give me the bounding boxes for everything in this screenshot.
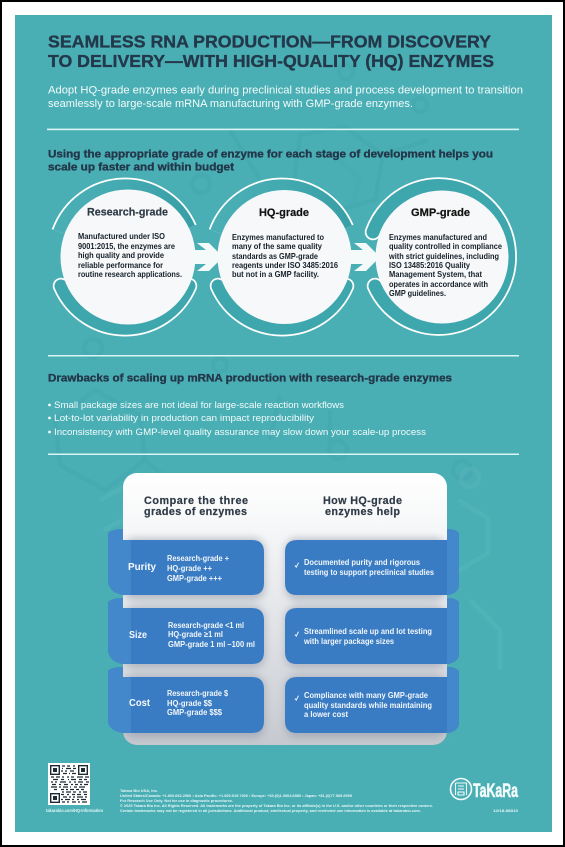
row: purity: HQ-grade ++ <box>167 564 212 573</box>
arrow: research to HQ <box>193 243 223 271</box>
benefit: cost <box>285 667 459 733</box>
benefit: cost: a lower cost <box>304 710 348 719</box>
section heading: drawbacks: Drawbacks of scaling up mRNA production with research-grade enzymes <box>48 372 452 384</box>
bullet list: Small package sizes are not ideal for large-scale reaction workflows <box>54 400 344 411</box>
column heading: compare: grades of enzymes <box>144 506 247 518</box>
column heading: how HQ helps: enzymes help <box>325 506 400 518</box>
circle: research-grade: Manufactured under ISO <box>78 232 166 241</box>
circle: HQ-grade: many of the same quality <box>232 242 322 251</box>
circle: HQ-grade <box>216 186 352 328</box>
intro text: seamlessly to large-scale mRNA manufacturing with GMP-grade enzymes. <box>48 98 413 110</box>
circle: GMP-grade: Management System, that <box>389 270 482 279</box>
benefit: size: with larger package sizes <box>303 637 395 646</box>
circle: HQ-grade: Enzymes manufactured to <box>232 233 324 242</box>
row: cost: Cost <box>129 697 150 709</box>
section heading: grades: Using the appropriate grade of enzyme for each stage of development helps you <box>48 148 493 160</box>
panel shadows <box>123 538 447 738</box>
row: cost <box>108 667 264 733</box>
circle: research-grade: high quality and provide <box>78 251 164 260</box>
benefit: size <box>285 598 459 664</box>
row: size <box>108 598 264 664</box>
circle: research-grade: reliable performance for <box>78 261 164 270</box>
column heading: how HQ helps <box>323 495 402 518</box>
logo: TaKaRa <box>450 778 518 802</box>
QR code <box>48 763 90 805</box>
circle: GMP-grade: GMP-grade <box>411 207 470 219</box>
row: cost: HQ-grade $$ <box>167 699 213 708</box>
row: purity: Research-grade + <box>167 554 229 563</box>
legal footer text: Certain trademarks may not be registered in all jurisdictions. Additional product, intellectual property, and restricted use information is available at takarabio.com. <box>120 809 421 813</box>
benefit: size: Streamlined scale up and lot testing <box>304 627 432 636</box>
intro text: Adopt HQ-grade enzymes early during preclinical studies and process development to transition <box>48 84 523 96</box>
row: cost: GMP-grade $$$ <box>167 708 223 717</box>
circle: GMP-grade: operates in accordance with <box>389 280 488 289</box>
circle: GMP-grade: ISO 13485:2016 Quality <box>389 261 470 270</box>
circle: GMP-grade: quality controlled in compliance <box>389 242 502 251</box>
document code: 12/18.88810 <box>493 809 518 813</box>
circle: research-grade <box>60 186 196 328</box>
section heading: grades: scale up faster and within budget <box>48 162 234 174</box>
section heading: grades <box>48 148 493 174</box>
row: purity: GMP-grade +++ <box>167 574 222 583</box>
legal footer text: United States/Canada: +1.800.662.2566 • Asia Pacific: +1.650.919.7300 • Europe: +33.(0)1.3904.6880 • Japan: +81.(0)77.565.6999 <box>120 794 352 798</box>
logo: TaKaRa: TaKaRa <box>473 780 518 802</box>
benefit: purity: Documented purity and rigorous <box>304 558 421 567</box>
comparison panel <box>123 473 447 745</box>
legal footer text: Takara Bio USA, Inc. <box>120 789 158 793</box>
row: size: Size <box>129 629 147 641</box>
row: purity <box>108 529 264 595</box>
title <box>48 32 494 71</box>
circle: HQ-grade: HQ-grade <box>259 207 309 219</box>
row: cost: Research-grade $ <box>167 689 228 698</box>
background molecule pattern, lower right and left <box>100 469 500 670</box>
circle: GMP-grade <box>373 186 509 328</box>
benefit: purity: testing to support preclinical studies <box>304 568 435 577</box>
row: size: HQ-grade ≥1 ml <box>168 630 223 639</box>
arrow: HQ to GMP <box>350 243 380 271</box>
column heading: compare: Compare the three <box>144 495 248 507</box>
bullet list: Lot-to-lot variability in production can impact reproducibility <box>54 413 314 424</box>
circle: GMP-grade: Enzymes manufactured and <box>389 233 487 242</box>
row: size: GMP-grade 1 ml –100 ml <box>168 640 255 649</box>
benefit: purity <box>285 529 459 595</box>
benefit: cost: quality standards while maintaining <box>304 701 432 710</box>
column heading: how HQ helps: How HQ-grade <box>323 495 402 507</box>
row: size: Research-grade <1 ml <box>168 621 244 630</box>
title: SEAMLESS RNA PRODUCTION—FROM DISCOVERY <box>48 32 491 52</box>
legal footer text <box>120 789 433 813</box>
circle: HQ-grade: standards as GMP-grade <box>232 252 318 261</box>
bullet list: Inconsistency with GMP-level quality assurance may slow down your scale-up process <box>54 427 426 438</box>
benefit: cost: Compliance with many GMP-grade <box>304 691 429 700</box>
circle: research-grade: routine research applications. <box>78 270 182 279</box>
circle: research-grade: Research-grade <box>87 206 168 218</box>
title: TO DELIVERY—WITH HIGH-QUALITY (HQ) ENZYMES <box>48 51 494 71</box>
legal footer text: For Research Use Only. Not for use in diagnostic procedures. <box>120 799 233 803</box>
circle: HQ-grade: reagents under ISO 3485:2016 <box>232 261 338 270</box>
bullet list <box>48 400 426 438</box>
circle: GMP-grade: with strict guidelines, including <box>388 252 499 261</box>
circle: GMP-grade: GMP guidelines. <box>389 289 446 298</box>
circle: HQ-grade: but not in a GMP facility. <box>232 270 319 279</box>
row: purity: Purity <box>128 561 156 573</box>
circle: research-grade: 9001:2015, the enzymes are <box>78 242 175 251</box>
intro text <box>48 84 523 110</box>
column heading: compare <box>144 495 248 518</box>
legal footer text: © 2025 Takara Bio Inc. All Rights Reserved. All trademarks are the property of Takara Bio Inc. or its affiliate(s) in the U.S. and/or other countries or their respective owners. <box>120 804 433 808</box>
QR url: takarabio.com/HQ-Information <box>46 808 103 813</box>
background molecule pattern <box>55 65 471 490</box>
